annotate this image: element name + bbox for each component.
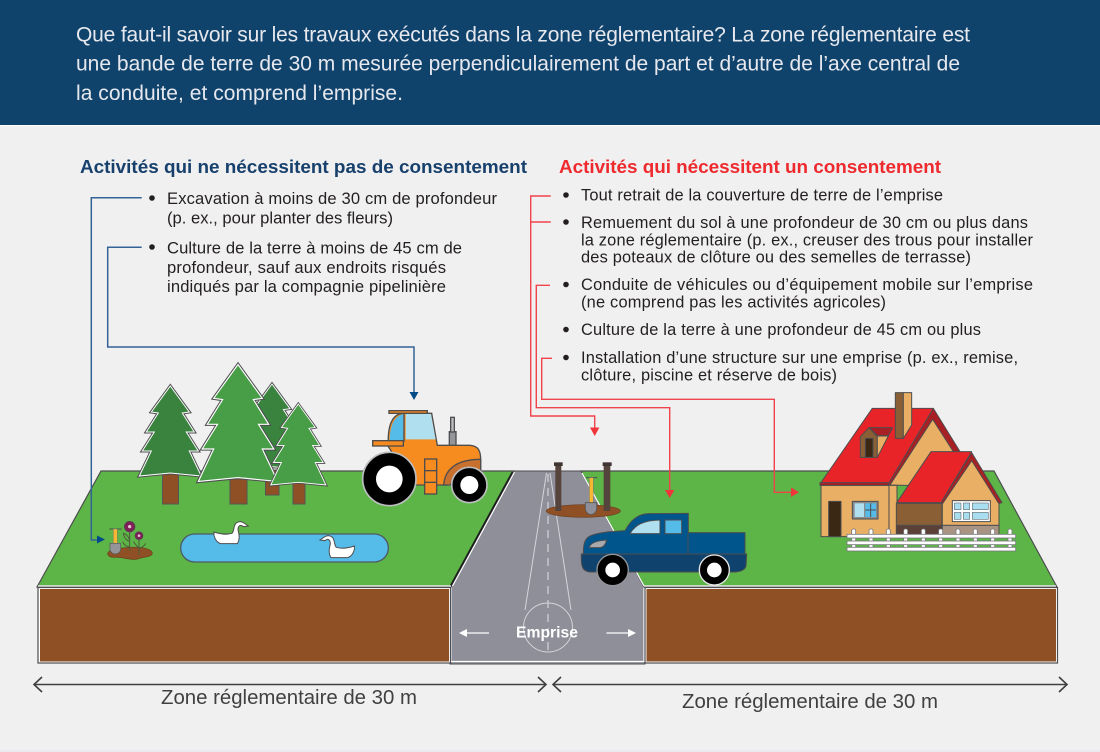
left ground bbox=[37, 471, 514, 587]
dimension: right 30 m zone: Zone réglementaire de 30 m bbox=[682, 691, 938, 713]
header banner: une bande de terre de 30 m mesurée perpendiculairement de part et d’autre de l’axe central de bbox=[76, 52, 960, 76]
heading: consent required: Activités qui nécessitent un consentement bbox=[559, 157, 942, 178]
dimension: right 30 m zone bbox=[553, 677, 1067, 713]
list: activities requiring consent: (ne comprend pas les activités agricoles) bbox=[581, 294, 886, 312]
chimney back roof bbox=[888, 413, 960, 487]
white fence bbox=[847, 529, 1016, 551]
pond with swans bbox=[181, 522, 388, 562]
tree: left bbox=[139, 386, 201, 504]
house bbox=[820, 393, 1002, 537]
chimney bbox=[895, 393, 903, 438]
trees bbox=[139, 364, 326, 504]
dimension: left 30 m zone: Zone réglementaire de 30 m bbox=[161, 687, 417, 709]
right soil block bbox=[645, 588, 1058, 663]
fence posts and excavation bbox=[546, 462, 620, 517]
pickup truck bbox=[581, 513, 747, 586]
road / right-of-way bbox=[450, 471, 645, 664]
main front wall bbox=[821, 485, 889, 537]
connector: removal and soil disturbance (red) bbox=[531, 196, 599, 436]
list: activities requiring consent: Tout retrait de la couverture de terre de l’emprise bbox=[581, 186, 943, 204]
list: activities without consent bbox=[149, 189, 497, 296]
list: activities requiring consent bbox=[563, 186, 1034, 384]
small roof bbox=[941, 453, 1002, 504]
dormer bbox=[860, 428, 877, 457]
heading: no consent: Activités qui ne nécessitent pas de consentement bbox=[80, 157, 528, 178]
label: Emprise: Emprise bbox=[516, 624, 578, 642]
list: activities requiring consent: Conduite de véhicules ou d’équipement mobile sur l’emprise bbox=[581, 276, 1033, 294]
garage bbox=[896, 503, 942, 525]
right ground bbox=[581, 471, 1057, 587]
header banner: la conduite, et comprend l’emprise. bbox=[76, 82, 403, 105]
swan: right bbox=[320, 536, 354, 558]
list: activities requiring consent: Remuement du sol à une profondeur de 30 cm ou plus dans bbox=[581, 214, 1028, 232]
tree: large centre bbox=[198, 364, 278, 504]
dimension: left 30 m zone bbox=[34, 677, 546, 709]
tractor bbox=[363, 411, 487, 506]
left soil block bbox=[38, 588, 450, 663]
list: activities without consent: (p. ex., pour planter des fleurs) bbox=[167, 208, 393, 228]
list: activities requiring consent: Culture de la terre à une profondeur de 45 cm ou plus bbox=[581, 321, 981, 339]
list: activities without consent: profondeur, sauf aux endroits risqués bbox=[167, 258, 446, 277]
gable bbox=[942, 458, 999, 525]
connector: vehicles (red) bbox=[536, 285, 674, 498]
list: activities without consent: indiqués par la compagnie pipelinière bbox=[167, 277, 446, 296]
header banner bbox=[0, 0, 1100, 126]
header banner: Que faut-il savoir sur les travaux exécutés dans la zone réglementaire? La zone réglementaire est bbox=[76, 24, 970, 46]
connector: excavation (blue) bbox=[91, 198, 142, 543]
main red roof bbox=[820, 408, 933, 484]
icon: flowers and shovel bbox=[108, 521, 152, 559]
side dark roof band bbox=[888, 408, 960, 486]
swan: left bbox=[214, 522, 248, 544]
label: Emprise bbox=[459, 624, 636, 642]
list: activities requiring consent: Installation d’une structure sur une emprise (p. ex., remise, bbox=[581, 349, 1018, 367]
connector: cultivation (blue) bbox=[108, 247, 418, 400]
connector: structures (red) bbox=[542, 358, 799, 497]
list: activities without consent: Culture de la terre à moins de 45 cm de bbox=[167, 238, 462, 258]
tree: back dark bbox=[243, 384, 301, 495]
list: activities requiring consent: la zone réglementaire (p. ex., creuser des trous pour installer bbox=[581, 232, 1034, 250]
list: activities requiring consent: clôture, piscine et réserve de bois) bbox=[581, 366, 837, 384]
list: activities without consent: Excavation à moins de 30 cm de profondeur bbox=[167, 189, 497, 208]
tree: small right bbox=[271, 404, 326, 504]
list: activities requiring consent: des poteaux de clôture ou des semelles de terrasse) bbox=[581, 248, 971, 266]
